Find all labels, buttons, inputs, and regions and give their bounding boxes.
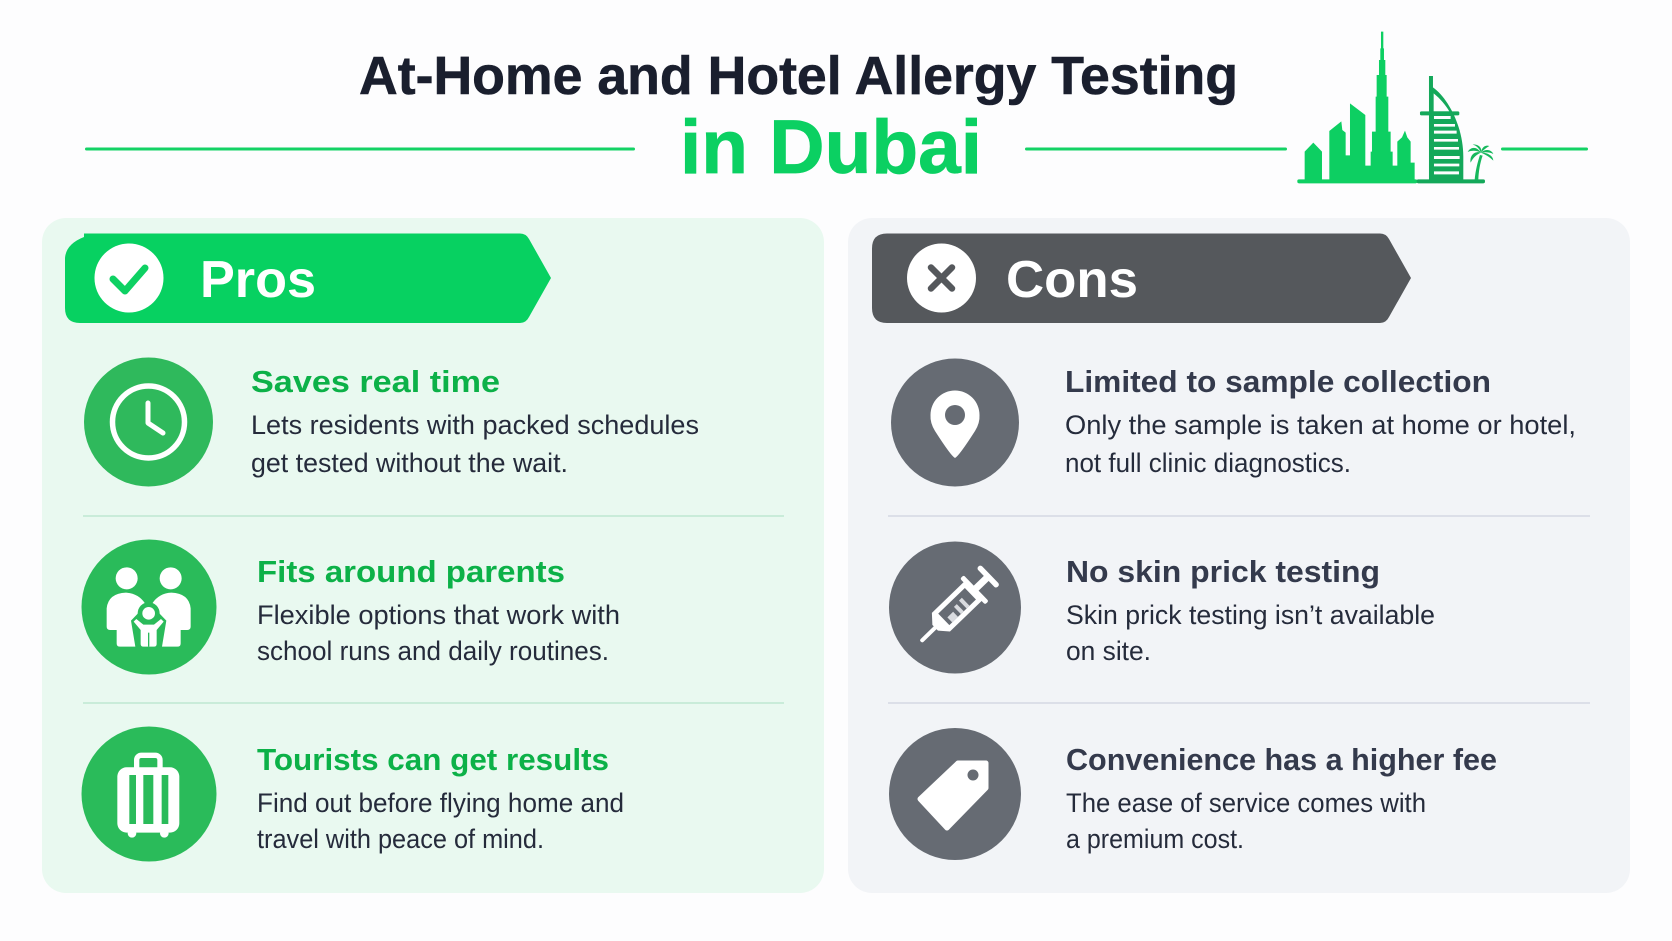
pros banner	[65, 234, 551, 323]
item: saves real time: Lets residents with packed schedules	[251, 410, 699, 440]
item: convenience has a higher fee: a premium cost.	[1066, 824, 1244, 854]
title: At-Home and Hotel Allergy Testing	[359, 46, 1238, 106]
item: limited to sample collection: not full clinic diagnostics.	[1065, 448, 1351, 478]
item: limited to sample collection: Only the sample is taken at home or hotel,	[1065, 410, 1576, 440]
item: tourists: travel with peace of mind.	[257, 824, 544, 854]
icon: map pin	[891, 358, 1019, 486]
panel: pros	[42, 218, 824, 893]
icon: price tag	[889, 728, 1021, 860]
icon: suitcase	[82, 726, 216, 862]
item: no skin prick testing: No skin prick testing	[1066, 554, 1380, 589]
icon: x mark	[907, 244, 976, 312]
panel: cons	[848, 218, 1630, 893]
item: saves real time	[84, 358, 699, 486]
item: fits around parents: school runs and daily routines.	[257, 636, 609, 666]
item: tourists: Tourists can get results	[257, 742, 609, 777]
icon: check	[94, 244, 164, 312]
item: fits around parents: Flexible options that work with	[257, 600, 620, 630]
item: no skin prick testing: Skin prick testing isn’t available	[1066, 600, 1435, 630]
icon: syringe	[889, 542, 1021, 674]
item: fits around parents: Fits around parents	[257, 554, 565, 589]
item: no skin prick testing	[889, 542, 1435, 674]
item: saves real time: get tested without the wait.	[251, 448, 568, 478]
item: convenience has a higher fee: Convenience has a higher fee	[1066, 742, 1497, 777]
item: no skin prick testing: on site.	[1066, 636, 1151, 666]
icon: family	[82, 540, 216, 674]
item: convenience has a higher fee: The ease of service comes with	[1066, 788, 1426, 818]
item: limited to sample collection: Limited to sample collection	[1065, 364, 1491, 399]
pros banner: Pros	[200, 251, 316, 309]
cons banner	[872, 234, 1411, 323]
item: convenience has a higher fee	[889, 728, 1497, 860]
item: tourists: Find out before flying home and	[257, 788, 624, 818]
item: tourists	[82, 726, 624, 862]
item: fits around parents	[82, 540, 620, 674]
title: in Dubai	[680, 105, 982, 190]
item: limited to sample collection	[891, 358, 1576, 486]
cons banner: Cons	[1006, 251, 1138, 309]
title	[359, 46, 1238, 190]
item: saves real time: Saves real time	[251, 364, 500, 399]
icon: clock	[84, 358, 213, 486]
icon: Dubai skyline	[1297, 32, 1493, 183]
